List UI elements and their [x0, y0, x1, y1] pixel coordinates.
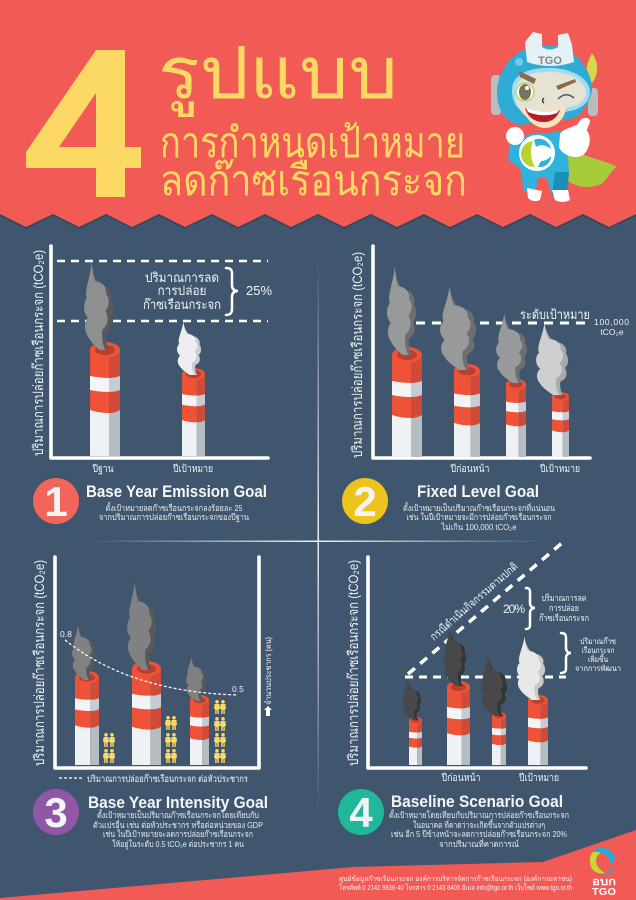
description 4: ในอนาคต ที่คาดว่าจะเกิดขึ้นจากตัวแปรต่างๆ	[413, 819, 545, 830]
description 2: ไม่เกิน 100,000 tCO₂e	[441, 522, 517, 532]
business as usual label: กรณีดำเนินกิจกรรมตามปกติ	[427, 560, 520, 643]
reduction label: ก๊าซเรือนกระจก	[143, 297, 221, 312]
description 2: เช่น ในปีเป้าหมายจะมีการปล่อยก๊าซเรือนกระจก	[406, 512, 552, 522]
stack 3	[496, 314, 527, 458]
description 3: ให้อยู่ในระดับ 0.5 tCO₂e ต่อประชากร 1 คน	[112, 839, 244, 850]
logo: TGO: TGO	[592, 887, 616, 898]
footer band	[0, 830, 636, 900]
panel 1: base year emission goal	[30, 246, 272, 525]
stack 4	[517, 637, 548, 774]
divider: vertical	[318, 258, 319, 816]
x labels: ปีเป้าหมาย	[518, 772, 559, 784]
chart axes	[368, 557, 586, 768]
number badge 4: 4	[349, 789, 373, 836]
x labels: ปีเป้าหมาย	[539, 463, 580, 475]
x labels: ปีฐาน	[92, 463, 114, 475]
description 4: เช่น อีก 5 ปีข้างหน้าจะลดการปล่อยก๊าซเรือนกระจก 20%	[391, 829, 567, 839]
target dashed lines	[57, 261, 268, 321]
stack 1	[72, 625, 99, 765]
logo: TGO	[590, 848, 616, 898]
growth label: จากการพัฒนา	[575, 664, 621, 673]
reduction label: ปริมาณการลด	[542, 593, 587, 603]
description 1	[99, 502, 249, 523]
chart axes	[51, 246, 268, 458]
description 4	[389, 809, 569, 849]
x labels: ปีก่อนหน้า	[450, 463, 490, 475]
title numeral 4	[26, 50, 141, 197]
description 4: จากปริมาณที่คาดการณ์	[439, 838, 519, 849]
baseline dashed line	[405, 676, 566, 678]
x labels: ปีก่อนหน้า	[441, 772, 480, 784]
number badge 2: 2	[353, 478, 377, 525]
population axis label: จำนวนประชากร (คน)	[264, 637, 273, 705]
number badge 2	[342, 478, 388, 525]
reduction label	[143, 270, 221, 312]
heading 4: Baseline Scenario Goal	[391, 792, 563, 811]
brace	[226, 268, 238, 315]
heading 2: Fixed Level Goal	[417, 482, 539, 501]
business as usual dashed line	[408, 543, 562, 674]
number badge 1	[33, 478, 79, 525]
growth label: เพิ่มขึ้น	[588, 653, 608, 664]
reduction label: ปริมาณการลด	[145, 270, 219, 285]
description 4: ตั้งเป้าหมายโดยเทียบกับปริมาณการปล่อยก๊าซเรือนกระจก	[389, 809, 569, 820]
smoke stack: target year	[177, 322, 205, 458]
description 2: ตั้งเป้าหมายเป็นปริมาณก๊าซเรือนกระจกที่แน่นอน	[403, 502, 555, 513]
percent 25: 25%	[246, 283, 272, 298]
footer contact text: โทรศัพท์ 0 2141 9836-40 โทรสาร 0 2143 8405 อีเมล info@tgo.or.th เว็บไซต์ www.tgo.or.th	[339, 883, 572, 892]
footer contact text: ศูนย์ข้อมูลก๊าซเรือนกระจก องค์การบริหารจัดการก๊าซเรือนกระจก (องค์การมหาชน)	[339, 875, 572, 883]
people icons: population	[103, 700, 226, 763]
heading 1: Base Year Emission Goal	[86, 482, 267, 501]
stack 1	[403, 680, 422, 768]
intensity curve	[65, 640, 238, 695]
chart axes	[373, 246, 590, 458]
target label: ระดับเป้าหมาย	[520, 307, 590, 322]
y axis label: ปริมาณการปล่อยก๊าซเรือนกระจก (tCO₂e)	[345, 560, 361, 766]
panel 2: fixed level goal	[342, 246, 629, 532]
heading 3: Base Year Intensity Goal	[88, 793, 268, 812]
reduction label: ก๊าซเรือนกระจก	[539, 613, 589, 623]
stack 4	[536, 323, 569, 459]
stack 3	[186, 657, 209, 770]
reduction label	[539, 593, 589, 623]
stack 1	[387, 267, 422, 465]
title text: การกำหนดเป้าหมาย	[160, 119, 465, 166]
description 3	[93, 809, 263, 850]
growth label: เรือนกระจก	[582, 646, 615, 655]
stack 2	[127, 582, 161, 775]
description 3: ตัวแปรอื่น เช่น ต่อหัวประชากร หรือต่อหน่วยของ GDP	[93, 819, 263, 830]
x labels	[450, 463, 580, 475]
footer contact text	[339, 875, 572, 892]
description 3: เช่น ในปีเป้าหมายจะลดการปล่อยก๊าซเรือนกระจก	[103, 829, 253, 839]
panel 3: base year intensity goal	[31, 557, 273, 850]
title text: รูปแบบ	[158, 34, 398, 117]
title text: ลดก๊าซเรือนกระจก	[160, 157, 467, 204]
y axis label: ปริมาณการปล่อยก๊าซเรือนกระจก (tCO₂e)	[349, 252, 365, 458]
description 1: ตั้งเป้าหมายลดก๊าซเรือนกระจกลงร้อยละ 25	[106, 502, 243, 513]
icon: TGO mascot: TGO	[538, 55, 562, 67]
target value: tCO₂e	[600, 327, 624, 337]
stack 2	[444, 628, 470, 771]
brace lower	[561, 633, 571, 673]
stack 3	[481, 656, 507, 767]
number badge 3: 3	[44, 789, 68, 836]
chart frame	[55, 557, 259, 768]
stack 2	[440, 287, 480, 466]
number badge 4	[338, 789, 384, 836]
description 3: ตั้งเป้าหมายเป็นปริมาณก๊าซเรือนกระจกโดยเทียบกับ	[97, 809, 259, 820]
growth label: ปริมาณก๊าซ	[580, 636, 616, 646]
curve value start: 0.8	[60, 629, 72, 639]
number badge 1: 1	[44, 478, 68, 525]
percent 20: 20%	[503, 602, 525, 616]
reduction label: การปล่อย	[158, 283, 206, 298]
smoke stack: base year	[84, 262, 120, 460]
y axis label: ปริมาณการปล่อยก๊าซเรือนกระจก (tCO₂e)	[31, 560, 47, 766]
description 1: จากปริมาณการปล่อยก๊าซเรือนกระจกของปีฐาน	[99, 512, 249, 523]
y axis label: ปริมาณการปล่อยก๊าซเรือนกระจก (tCO₂e)	[30, 250, 46, 456]
divider: horizontal	[90, 540, 546, 542]
target value	[594, 317, 629, 337]
x labels: ปีเป้าหมาย	[172, 463, 213, 475]
target value: 100,000	[594, 317, 629, 327]
number badge 3	[33, 789, 79, 836]
reduction label: การปล่อย	[549, 603, 579, 613]
growth label	[575, 636, 621, 673]
x labels	[92, 463, 213, 475]
logo: TGO: อบก	[592, 877, 616, 888]
legend: ปริมาณการปล่อยก๊าซเรือนกระจก ต่อหัวประชากร	[87, 773, 248, 785]
panel 4: baseline scenario goal	[338, 543, 621, 849]
target dashed line	[416, 322, 590, 324]
curve value end: 0.5	[232, 684, 244, 694]
title text	[158, 34, 467, 204]
header banner	[0, 0, 636, 229]
brace upper	[526, 588, 535, 629]
x labels	[441, 772, 559, 784]
description 2	[403, 502, 555, 532]
icon: TGO mascot	[491, 32, 617, 202]
